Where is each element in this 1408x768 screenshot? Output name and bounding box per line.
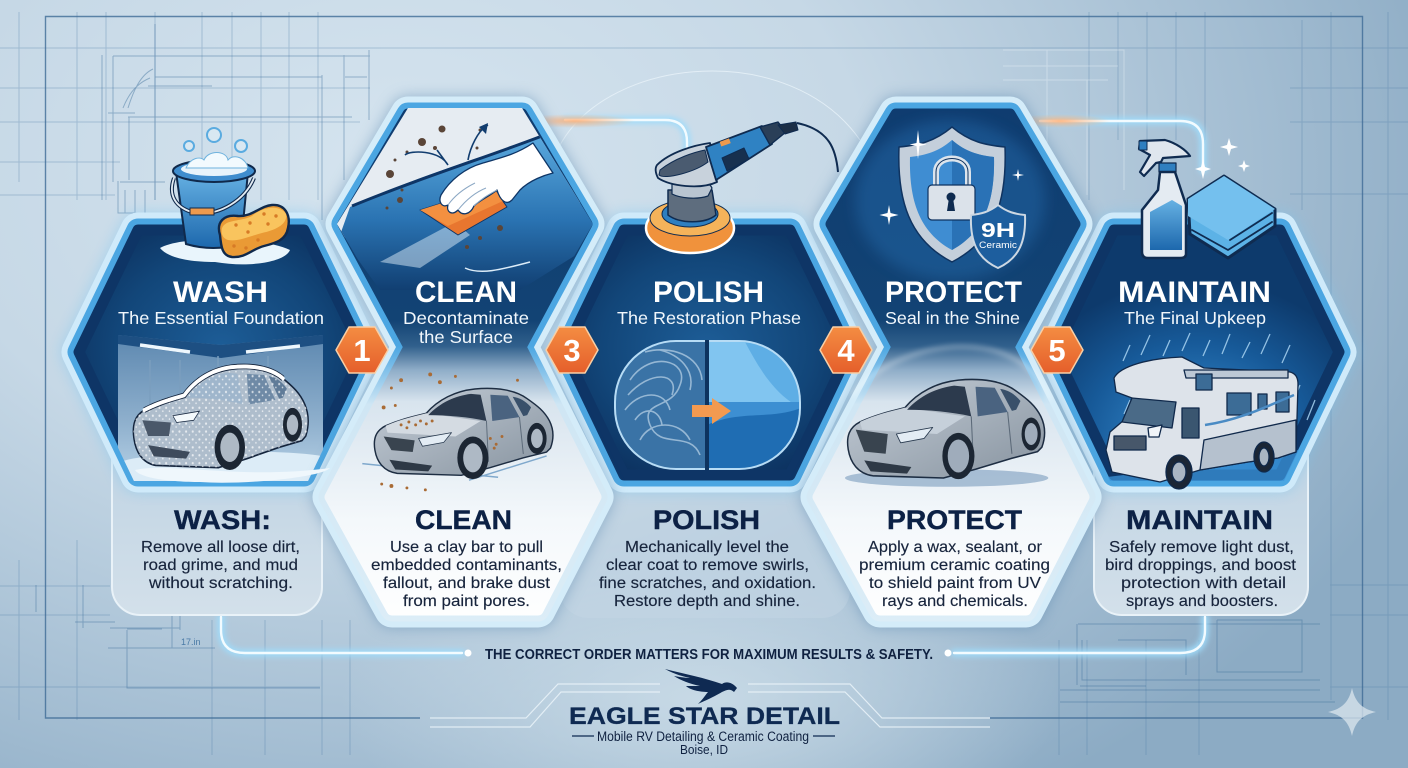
step badge 1 xyxy=(336,327,388,373)
heading: protect xyxy=(885,276,1022,328)
logo: eagle xyxy=(665,669,737,704)
panel: polish hexagon xyxy=(565,230,849,475)
icon: spray bottle xyxy=(1139,140,1190,258)
panel: maintain hexagon xyxy=(1055,230,1340,490)
icon: 9H ceramic badge xyxy=(971,205,1025,268)
clean car with contamination specks xyxy=(362,372,553,491)
icon: shield with padlock xyxy=(899,127,1005,262)
text block: polish: fine scratches, and oxidation. xyxy=(599,575,816,592)
text block: wash: WASH: xyxy=(174,505,271,535)
footer circuit lines xyxy=(430,684,990,727)
step badge 3: 3 xyxy=(563,333,581,368)
heading: clean xyxy=(403,276,529,347)
text block: maintain: protection with detail xyxy=(1121,575,1286,592)
callout: order matters: THE CORRECT ORDER MATTERS FOR MAXIMUM RESULTS & SAFETY. xyxy=(485,647,933,663)
heading: wash xyxy=(118,276,324,328)
step badge 4 xyxy=(820,327,872,373)
text block: clean: from paint pores. xyxy=(403,593,530,610)
icon: four-point star xyxy=(1328,688,1376,736)
clean scene: gloved hand with clay bar on panel xyxy=(337,108,593,280)
text block: clean: fallout, and brake dust xyxy=(383,575,551,592)
text block: clean: CLEAN xyxy=(415,505,512,535)
panel: wash hexagon xyxy=(79,230,363,495)
logo: tagline: Boise, ID xyxy=(680,742,728,757)
text block: maintain xyxy=(1105,505,1297,610)
text block: wash: road grime, and mud xyxy=(143,557,298,574)
heading: clean: Decontaminate xyxy=(403,308,529,328)
text block: polish: Restore depth and shine. xyxy=(614,593,800,610)
text block: polish: clear coat to remove swirls, xyxy=(606,557,809,574)
text panel: maintain card xyxy=(1094,420,1308,615)
text block: clean xyxy=(371,505,562,610)
dimension label: 17.in xyxy=(181,637,201,647)
panel: protect hexagon xyxy=(818,114,1084,610)
step badge 3 xyxy=(546,327,598,373)
logo: tagline: Mobile RV Detailing & Ceramic Coating xyxy=(597,729,809,744)
maintain scene: rain over RV xyxy=(1108,332,1316,481)
heading: maintain: The Final Upkeep xyxy=(1124,308,1266,328)
text block: maintain: MAINTAIN xyxy=(1126,505,1273,535)
RV vehicle xyxy=(1106,357,1298,489)
step badge 4: 4 xyxy=(837,333,855,368)
thin arc behind polisher xyxy=(560,71,860,145)
heading: wash: The Essential Foundation xyxy=(118,308,324,328)
text panel: wash card xyxy=(112,420,322,615)
panel: clean hexagon xyxy=(330,100,600,610)
icon: 9H ceramic badge: 9H xyxy=(981,220,1015,242)
text block: protect: rays and chemicals. xyxy=(882,593,1028,610)
step badge 5: 5 xyxy=(1048,333,1066,368)
logo: tagline xyxy=(572,729,835,757)
text block: maintain: sprays and boosters. xyxy=(1126,593,1278,610)
protect car xyxy=(845,379,1048,487)
heading: protect: Seal in the Shine xyxy=(885,308,1020,328)
icon: sponge xyxy=(219,205,289,257)
text block: clean: Use a clay bar to pull xyxy=(390,539,543,556)
text panel: polish card xyxy=(560,420,850,618)
icon: sparkles near towel xyxy=(1195,138,1250,179)
icon: bucket with foam and bubbles xyxy=(160,128,290,264)
heading: protect: PROTECT xyxy=(885,276,1022,309)
text block: wash: Remove all loose dirt, xyxy=(141,539,300,556)
heading: polish xyxy=(617,276,801,328)
glowing connectors xyxy=(221,114,1205,656)
text block: polish xyxy=(599,505,816,610)
text block: maintain: bird droppings, and boost xyxy=(1105,557,1297,574)
text block: protect: Apply a wax, sealant, or xyxy=(868,539,1043,556)
text block: polish: Mechanically level the xyxy=(625,539,789,556)
step badge 5 xyxy=(1031,327,1083,373)
polish scene: before and after paint disc xyxy=(614,340,801,470)
text block: wash: without scratching. xyxy=(148,575,293,592)
wash scene: garage with foamed SUV xyxy=(118,335,323,481)
heading: clean: CLEAN xyxy=(415,276,517,309)
heading: polish: The Restoration Phase xyxy=(617,308,801,328)
text block: polish: POLISH xyxy=(653,505,760,535)
text block: protect xyxy=(859,505,1050,610)
text block: maintain: Safely remove light dust, xyxy=(1109,539,1294,556)
heading: clean: the Surface xyxy=(419,327,513,347)
text block: clean: embedded contaminants, xyxy=(371,557,562,574)
logo: brand name: EAGLE STAR DETAIL xyxy=(569,703,840,730)
text block: protect: to shield paint from UV xyxy=(869,575,1041,592)
text block: protect: PROTECT xyxy=(887,505,1023,535)
icon: sparkles around shield xyxy=(880,130,1024,225)
icon: 9H ceramic badge: Ceramic xyxy=(979,240,1018,250)
text block: wash xyxy=(141,505,300,592)
icon: folded microfiber towel xyxy=(1188,176,1275,258)
heading: maintain xyxy=(1118,276,1271,328)
wash SUV under foam xyxy=(133,366,330,483)
text block: protect: premium ceramic coating xyxy=(859,557,1050,574)
heading: wash: WASH xyxy=(173,276,268,309)
step badge 1: 1 xyxy=(353,333,371,368)
icon: dual action polisher xyxy=(646,122,838,253)
heading: maintain: MAINTAIN xyxy=(1118,276,1271,309)
heading: polish: POLISH xyxy=(653,276,764,309)
